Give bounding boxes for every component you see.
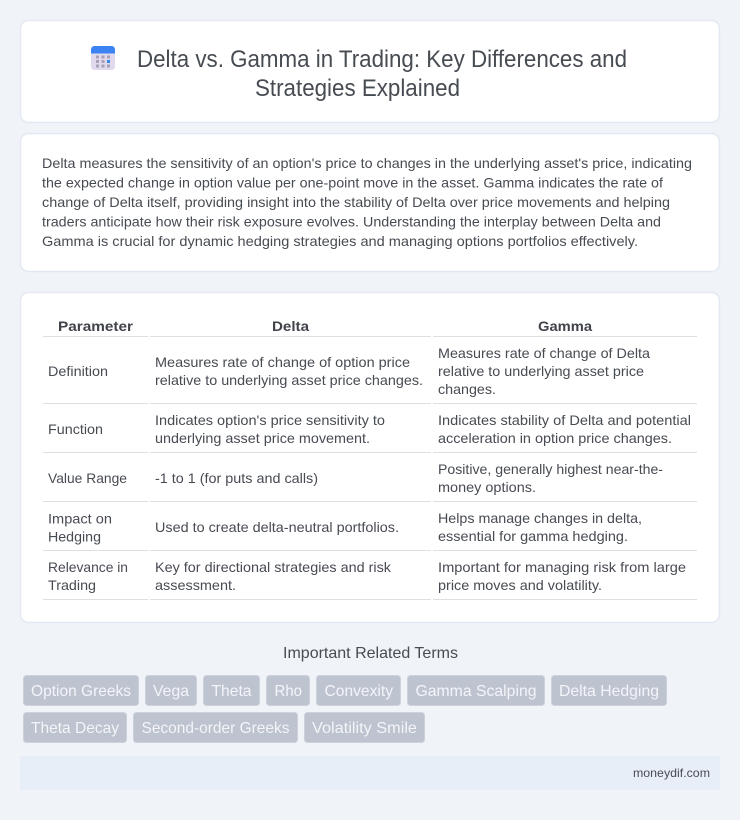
table row: Definition: [48, 345, 650, 397]
table row: Relevance in Trading: assessment.: [155, 577, 236, 593]
tag: Theta: [204, 676, 260, 706]
tag: Volatility Smile: Volatility Smile: [312, 720, 417, 737]
text block: Delta and Gamma explanation: [42, 155, 692, 249]
table row: Definition: Measures rate of change of Delta: [438, 345, 650, 361]
related term tags: [24, 676, 666, 742]
panel: introduction: [20, 134, 720, 272]
tag: Gamma Scalping: [408, 676, 544, 706]
tag: Option Greeks: Option Greeks: [31, 683, 131, 700]
tag: Vega: Vega: [153, 683, 189, 700]
table row: Impact on Hedging: essential for gamma hedging.: [438, 528, 628, 544]
tag: Second-order Greeks: Second-order Greeks: [142, 720, 290, 737]
tag: Option Greeks: [24, 676, 138, 706]
table row: Value Range: money options.: [438, 479, 536, 495]
table row: Relevance in Trading: Key for directional strategies and risk: [155, 559, 392, 575]
table row: Relevance in Trading: [48, 559, 686, 593]
heading: related terms: Important Related Terms: [283, 645, 458, 662]
icon: calendar: [91, 46, 115, 70]
title: Delta vs. Gamma in Trading: Key Differences and: [137, 46, 627, 73]
tag: Delta Hedging: Delta Hedging: [559, 683, 659, 700]
footer: moneydif.com: [633, 766, 710, 780]
table row: Value Range: -1 to 1 (for puts and calls): [155, 470, 318, 486]
table header: Delta: [272, 318, 309, 334]
table row: Definition: relative to underlying asset price: [438, 363, 644, 379]
table row: Definition: changes.: [438, 381, 496, 397]
table row: Impact on Hedging: Helps manage changes in delta,: [438, 510, 642, 526]
text block: Delta and Gamma explanation: traders anticipate how their risk exposure evolves. Understanding the interplay between Delta and: [42, 214, 661, 230]
table row: Impact on Hedging: Impact on: [48, 510, 112, 526]
table header: Gamma: [538, 318, 592, 334]
table row: Definition: Definition: [48, 363, 108, 379]
tag: Theta: Theta: [212, 683, 252, 700]
tag: Rho: [266, 676, 310, 706]
table row: Definition: Measures rate of change of option price: [155, 354, 410, 370]
table row: Function: underlying asset price movement.: [155, 430, 370, 446]
tag: Delta Hedging: [552, 676, 666, 706]
table row: Impact on Hedging: Hedging: [48, 528, 101, 544]
tag: Vega: [146, 676, 196, 706]
table row: Relevance in Trading: Important for managing risk from large: [438, 559, 686, 575]
panel: comparison table: [20, 292, 720, 622]
table row: Relevance in Trading: price moves and volatility.: [438, 577, 602, 593]
table header: [58, 318, 592, 334]
table row: Impact on Hedging: Used to create delta-neutral portfolios.: [155, 519, 399, 535]
text block: Delta and Gamma explanation: Delta measures the sensitivity of an option's price to changes in the underlying asset's price, indicating: [42, 155, 692, 171]
tag: Rho: Rho: [274, 683, 302, 700]
table row: Function: acceleration in option price changes.: [438, 430, 672, 446]
table row: Impact on Hedging: [48, 510, 642, 544]
table row: Function: [48, 412, 691, 446]
table row: Function: Function: [48, 421, 103, 437]
title: [137, 46, 627, 102]
panel: header: [20, 20, 720, 122]
table row: Definition: relative to underlying asset price changes.: [155, 372, 423, 388]
table row: Value Range: [48, 461, 663, 495]
tag: Gamma Scalping: Gamma Scalping: [416, 683, 536, 700]
table row: Value Range: Positive, generally highest near-the-: [438, 461, 663, 477]
table header: Parameter: [58, 318, 134, 334]
tag: Theta Decay: Theta Decay: [31, 720, 119, 737]
table row: Value Range: Value Range: [48, 470, 127, 486]
table row: Relevance in Trading: Relevance in: [48, 559, 128, 575]
footer: [20, 756, 720, 790]
title: Strategies Explained: [255, 75, 460, 102]
table row: Function: Indicates stability of Delta and potential: [438, 412, 691, 428]
tag: Convexity: [316, 676, 400, 706]
tag: Convexity: Convexity: [324, 683, 393, 700]
text block: Delta and Gamma explanation: Gamma is crucial for dynamic hedging strategies and managing options portfolios effectively.: [42, 233, 638, 249]
tag: Second-order Greeks: [134, 712, 298, 742]
text block: Delta and Gamma explanation: the expected change in option value per one-point move in the asset. Gamma indicates the rate of: [42, 174, 663, 190]
tag: Theta Decay: [24, 712, 126, 742]
text block: Delta and Gamma explanation: change of Delta itself, providing insight into the stability of Delta over price movements and helping: [42, 194, 670, 210]
tag: Volatility Smile: [304, 712, 424, 742]
table row: Relevance in Trading: Trading: [48, 577, 96, 593]
table row: Function: Indicates option's price sensitivity to: [155, 412, 385, 428]
